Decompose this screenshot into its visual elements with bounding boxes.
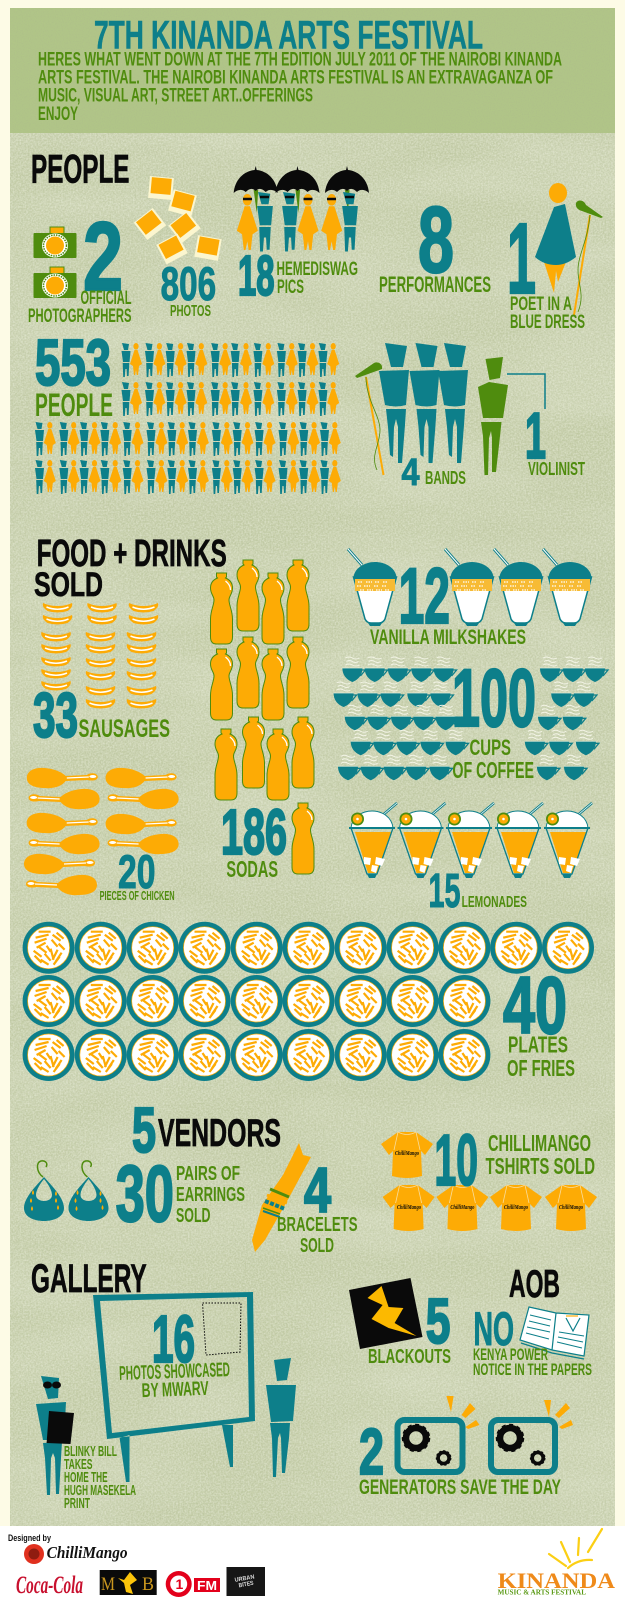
stat: 553 people	[35, 326, 341, 494]
designed by: Designed by	[8, 1533, 51, 1543]
stat: bracelets	[252, 1143, 358, 1257]
label: kenya power notice in the papers	[473, 1345, 592, 1379]
icon: couples in sunglasses	[237, 192, 358, 252]
label: bracelets sold: SOLD	[300, 1235, 334, 1257]
logo: chillimango	[24, 1543, 128, 1564]
number 15: 15	[428, 865, 460, 918]
logo: myb: M	[101, 1574, 115, 1595]
label: people: PEOPLE	[35, 387, 113, 423]
label: poet in a blue dress: POET IN A	[510, 294, 572, 315]
icon: arm with bracelets	[252, 1143, 311, 1252]
number 12: 12	[399, 551, 450, 640]
label: pairs of earrings sold	[176, 1162, 245, 1227]
stat: hemediswag pics	[234, 166, 369, 308]
number 186: 186	[221, 796, 287, 868]
gallery board	[93, 1292, 255, 1482]
label: plates of fries	[507, 1032, 575, 1081]
stat: sodas	[210, 560, 314, 882]
icon: umbrellas	[234, 166, 369, 213]
label: official photographers	[28, 288, 132, 327]
logo: kinanda: MUSIC & ARTS FESTIVAL	[498, 1588, 586, 1596]
label: pairs of earrings sold: EARRINGS	[176, 1183, 245, 1206]
label: kenya power notice in the papers: KENYA POWER	[473, 1345, 548, 1364]
stat: photographers	[28, 202, 132, 327]
icon: plates of fries	[23, 922, 594, 1081]
number 40: 40	[503, 961, 567, 1051]
logo: chillimango: ChilliMango	[47, 1543, 128, 1562]
logo: urban bites: BITES	[238, 1581, 254, 1589]
icon: open newspaper	[520, 1307, 589, 1359]
label: cups of coffee: CUPS	[470, 735, 511, 760]
number 806: 806	[161, 257, 216, 310]
stat: earrings	[24, 1149, 245, 1238]
number 2: 2	[83, 202, 123, 311]
section heading: food and drinks sold	[34, 533, 227, 604]
stat: violinist	[478, 357, 585, 479]
logo: kinanda	[498, 1529, 615, 1596]
icon: chillimango t-shirts: ChilliMango	[504, 1205, 528, 1211]
section heading: people: PEOPLE	[31, 148, 130, 192]
footer credits	[8, 1529, 615, 1599]
label: blackouts: BLACKOUTS	[368, 1346, 451, 1368]
label: blinky bill caption: PRINT	[64, 1495, 90, 1512]
label: bracelets sold: BRACELETS	[277, 1214, 358, 1236]
stat: sausages	[33, 603, 170, 751]
logo: kinanda: KINANDA	[498, 1568, 615, 1593]
number 100: 100	[452, 653, 536, 744]
number 5: 5	[426, 1285, 450, 1357]
number 1: 1	[525, 399, 546, 472]
label: pairs of earrings sold: PAIRS OF	[176, 1162, 240, 1185]
label: blinky bill caption: HUGH MASEKELA	[64, 1482, 136, 1499]
label: blinky bill caption: HOME THE	[64, 1469, 108, 1486]
icon: cameras	[34, 227, 76, 298]
stat: coffee	[334, 653, 608, 783]
label: official photographers: OFFICIAL	[80, 288, 132, 309]
label: blinky bill caption: TAKES	[64, 1456, 92, 1473]
header	[38, 13, 562, 125]
logo: urban bites	[226, 1567, 265, 1596]
number 20: 20	[118, 845, 156, 898]
label: chillimango tshirts sold	[486, 1130, 595, 1179]
icon: earrings	[24, 1161, 108, 1221]
intro text: MUSIC, VISUAL ART, STREET ART..OFFERINGS	[38, 86, 313, 107]
number 10: 10	[434, 1121, 478, 1201]
section heading: 5 vendors	[132, 1094, 281, 1166]
label: official photographers: PHOTOGRAPHERS	[28, 306, 132, 327]
footer band	[0, 1526, 625, 1600]
stat: lemonades	[349, 803, 592, 918]
intro text	[38, 50, 562, 125]
number 33: 33	[33, 681, 78, 751]
label: hemediswag pics	[276, 259, 358, 298]
blinky bill figure	[36, 1376, 136, 1512]
icon: generator two	[491, 1400, 573, 1472]
label: cups of coffee	[452, 735, 534, 783]
stat: kenya power notice	[473, 1302, 592, 1379]
stat: bands	[355, 343, 468, 494]
label: bands: BANDS	[425, 468, 466, 488]
label: vanilla milkshakes: VANILLA MILKSHAKES	[370, 626, 526, 649]
icon: soda bottles	[210, 560, 314, 874]
stat: chicken	[24, 768, 179, 903]
label: cups of coffee: OF COFFEE	[452, 757, 534, 783]
icon: viewer figure	[266, 1358, 296, 1477]
number 5: 5	[132, 1094, 156, 1166]
icon: lightning bolt on black	[349, 1278, 422, 1349]
label: photos showcased by mwarv	[119, 1359, 231, 1403]
logo: 1 fm: 1	[176, 1576, 184, 1592]
label: blinky bill caption	[64, 1443, 136, 1512]
icon: coffee cups	[334, 657, 608, 780]
dotted print outline	[202, 1303, 241, 1355]
label: lemonades: LEMONADES	[462, 894, 527, 911]
number 30: 30	[116, 1149, 174, 1238]
icon: chillimango t-shirts: ChilliMango	[395, 1151, 419, 1157]
number 4: 4	[304, 1156, 331, 1226]
label: photos showcased by mwarv: BY MWARV	[141, 1378, 209, 1402]
violin line	[507, 374, 545, 409]
stat: generators	[359, 1396, 573, 1499]
logo: myb	[100, 1570, 157, 1595]
stat: photos	[134, 176, 222, 320]
logo: urban bites: URBAN	[234, 1575, 255, 1584]
icon: chillimango t-shirts: ChilliMango	[397, 1205, 421, 1211]
label: sodas: SODAS	[226, 856, 278, 882]
section heading: food and drinks sold: SOLD	[34, 566, 103, 604]
icon: lemonades	[349, 803, 592, 878]
label: photos: PHOTOS	[170, 303, 211, 320]
label: hemediswag pics: PICS	[277, 277, 304, 298]
icon: chillimango t-shirts: ChilliMango	[559, 1205, 583, 1211]
stat: poet	[507, 183, 603, 333]
icon: band members	[379, 343, 468, 463]
icon: figure holding print	[36, 1376, 74, 1495]
icon: poet in blue dress with microphone	[535, 183, 603, 315]
label: pieces of chicken: PIECES OF CHICKEN	[100, 889, 175, 903]
icon: chillimango t-shirts	[381, 1132, 597, 1231]
icon: sausages	[41, 603, 158, 708]
logo: myb: B	[142, 1574, 154, 1595]
icon: scattered photos	[134, 176, 222, 264]
label: poet in a blue dress	[510, 294, 585, 333]
number 8: 8	[418, 187, 454, 292]
intro text: ENJOY	[38, 104, 78, 125]
stat: blackouts	[349, 1278, 451, 1368]
label: sausages: SAUSAGES	[78, 715, 170, 743]
icon: milkshakes	[348, 549, 592, 626]
icon: green figure	[478, 357, 508, 475]
logo: 1 fm	[166, 1571, 220, 1597]
section heading: aob: AOB	[509, 1263, 560, 1306]
label: plates of fries: PLATES	[508, 1032, 568, 1058]
number no: NO	[474, 1302, 514, 1355]
icon: microphone	[355, 362, 384, 475]
label: plates of fries: OF FRIES	[507, 1055, 575, 1081]
icon: chicken pieces	[24, 768, 179, 895]
label: bracelets sold	[277, 1214, 358, 1257]
label: photos showcased by mwarv: PHOTOS SHOWCASED	[119, 1359, 230, 1385]
logo: coca-cola: Coca-Cola	[16, 1572, 83, 1599]
logo: 1 fm: FM	[197, 1578, 217, 1593]
section heading: food and drinks sold: FOOD + DRINKS	[37, 533, 227, 575]
number 553: 553	[35, 326, 111, 399]
icon: chillimango t-shirts: ChilliMango	[450, 1205, 474, 1211]
label: vendors: VENDORS	[158, 1112, 281, 1155]
stat: performances	[379, 187, 491, 297]
number 4: 4	[402, 452, 420, 494]
stat: t-shirts	[381, 1121, 597, 1231]
stat: milkshakes	[348, 549, 592, 649]
label: pairs of earrings sold: SOLD	[176, 1204, 210, 1227]
label: blinky bill caption: BLINKY BILL	[64, 1443, 117, 1460]
label: performances: PERFORMANCES	[379, 272, 491, 297]
label: violinist: VIOLINIST	[528, 459, 585, 479]
number 1: 1	[507, 203, 536, 315]
number 16: 16	[152, 1302, 195, 1377]
stat: plates of fries	[23, 922, 594, 1081]
pictogram: crowd	[35, 343, 341, 494]
number 18: 18	[238, 244, 274, 308]
number 2: 2	[359, 1415, 384, 1488]
section heading: gallery: GALLERY	[31, 1257, 147, 1301]
icon: display board	[93, 1292, 255, 1482]
icon: generator one	[398, 1396, 480, 1472]
label: hemediswag pics: HEMEDISWAG	[276, 259, 358, 280]
